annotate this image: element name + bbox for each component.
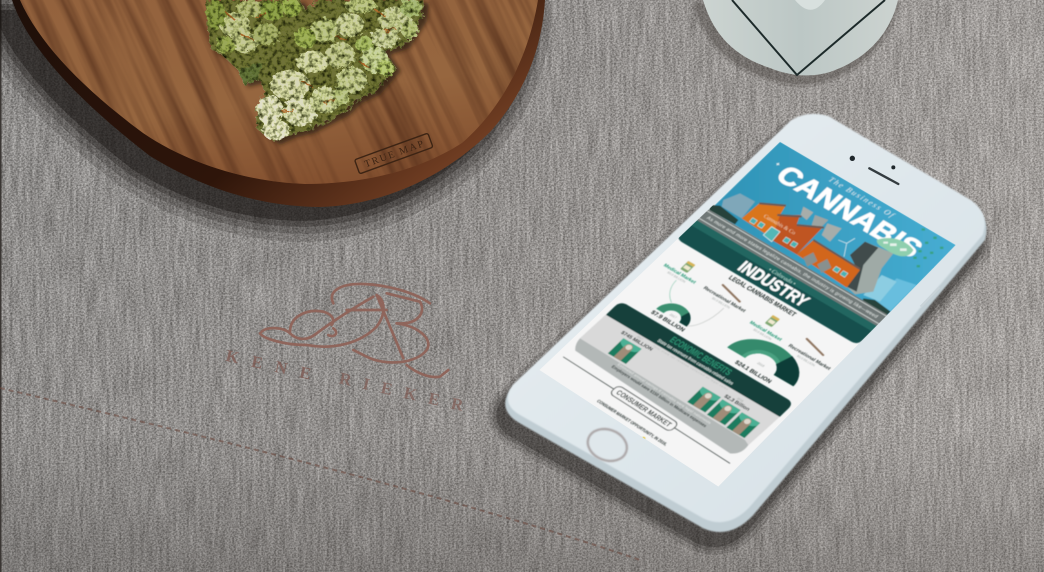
divider line	[558, 357, 736, 463]
economic benefits panel	[579, 301, 794, 443]
factory windows	[749, 218, 848, 277]
factory second wing	[797, 240, 860, 288]
recreational value: $0.0 BILLION	[796, 354, 816, 367]
economic panel light area	[580, 315, 780, 445]
intro sentence: As more and more states legalize cannabis, the industry is growing like—weed	[705, 216, 879, 320]
stitched seam line	[0, 388, 640, 560]
home button	[583, 424, 631, 466]
wind turbine	[838, 238, 855, 257]
subtitle script: The Business Of	[826, 175, 898, 220]
2018 amount: $2.3 Billion	[722, 394, 751, 412]
main title: CANNABIS	[770, 160, 929, 263]
speaker	[869, 168, 898, 184]
phone shadow	[499, 128, 981, 544]
screen content	[606, 209, 888, 438]
mug shadow	[698, 6, 893, 81]
factory roofs	[759, 203, 860, 269]
medical label: Medical Market	[748, 320, 783, 343]
economic panel background	[574, 338, 749, 454]
front camera	[850, 156, 855, 161]
screen	[539, 142, 956, 487]
brand name right: RIEKER	[337, 369, 466, 415]
gauge total: $24.1 BILLION	[733, 360, 772, 385]
market chart 2018	[717, 309, 843, 402]
phone front	[508, 114, 985, 522]
recreational value: $0.0 BILLION	[711, 296, 731, 310]
factory door	[763, 227, 780, 242]
header illustration	[709, 193, 943, 316]
section heading: INDUSTRY	[734, 258, 814, 310]
savings headline: Employers would save $150 billion in Medicare expenses	[610, 364, 708, 428]
medical value: $0.0 BILLION	[752, 328, 773, 341]
embroidered monogram logo	[224, 284, 466, 415]
gauge	[656, 298, 698, 327]
banner subtitle: State tax revenues from cannabis-related sales	[656, 338, 735, 387]
header sky	[710, 142, 956, 317]
2017 bar	[608, 338, 642, 364]
street strip	[695, 208, 891, 327]
branded stamp on board: TRUE MAP	[363, 139, 426, 170]
2018 year: 2018	[736, 397, 745, 403]
consumer pill: CONSUMER MARKET	[614, 389, 674, 429]
coffee mug	[698, 0, 898, 81]
small star: ✦	[773, 161, 782, 168]
2017 amount: $745 MILLION	[619, 330, 654, 352]
factory chimneys	[801, 207, 813, 220]
board surface	[20, 0, 538, 184]
background house	[722, 193, 755, 218]
branded stamp on board	[355, 133, 433, 174]
brand name left: KENE	[224, 346, 313, 383]
teal banner	[676, 219, 877, 345]
connector lines	[660, 280, 688, 303]
medical value: $0.0 BILLION	[666, 271, 687, 284]
bud cluster	[206, 0, 424, 142]
recreational label: Recreational Market	[787, 343, 832, 372]
gauge	[727, 328, 814, 386]
side button	[921, 287, 939, 307]
bushes	[709, 205, 891, 316]
board rim	[12, 0, 545, 207]
medical icon	[680, 261, 695, 273]
bud shadow	[211, 3, 429, 145]
consumer caption: CONSUMER MARKET OPPORTUNITY, IN 2016,	[596, 399, 668, 446]
factory sign: Cannabis & Co	[762, 214, 796, 237]
2018 bars	[685, 387, 762, 438]
consumer market section	[540, 354, 738, 481]
gauge total: $7.9 BILLION	[649, 310, 686, 333]
phone side edge	[505, 116, 987, 532]
banner heading: ECONOMIC BENEFITS	[667, 335, 734, 378]
yellow marker	[641, 436, 646, 440]
medical label: Medical Market	[662, 263, 697, 285]
glass towers	[873, 278, 917, 312]
dark banner	[606, 301, 794, 417]
savings caption: Estimated annual savings if cannabis were legal nationwide	[617, 363, 712, 425]
recreational label: Recreational Market	[702, 286, 747, 314]
board shadow	[0, 12, 529, 219]
savings text	[610, 361, 712, 429]
drifting leaves	[913, 228, 943, 267]
chart heading: LEGAL CANNABIS MARKET	[727, 275, 798, 318]
phone	[499, 114, 987, 544]
gauge year: 2017	[668, 313, 678, 319]
orange factory	[742, 203, 823, 254]
flying bud pile	[877, 238, 913, 256]
sensor	[891, 165, 895, 169]
cannabis buds	[206, 0, 429, 145]
state label: • Colorado •	[766, 267, 797, 287]
wooden board	[0, 0, 653, 219]
recreational icon	[718, 285, 744, 302]
panel note: Total state tax revenue collected on legal sales	[652, 344, 730, 391]
header title block	[776, 162, 923, 258]
recreational icon	[802, 339, 827, 355]
market chart 2017	[650, 260, 746, 332]
medical icon	[765, 315, 780, 327]
cooling tower	[847, 242, 893, 294]
2017 value: 2017	[636, 335, 645, 341]
lower drums	[803, 252, 831, 273]
gauge year: 2018	[756, 361, 766, 368]
